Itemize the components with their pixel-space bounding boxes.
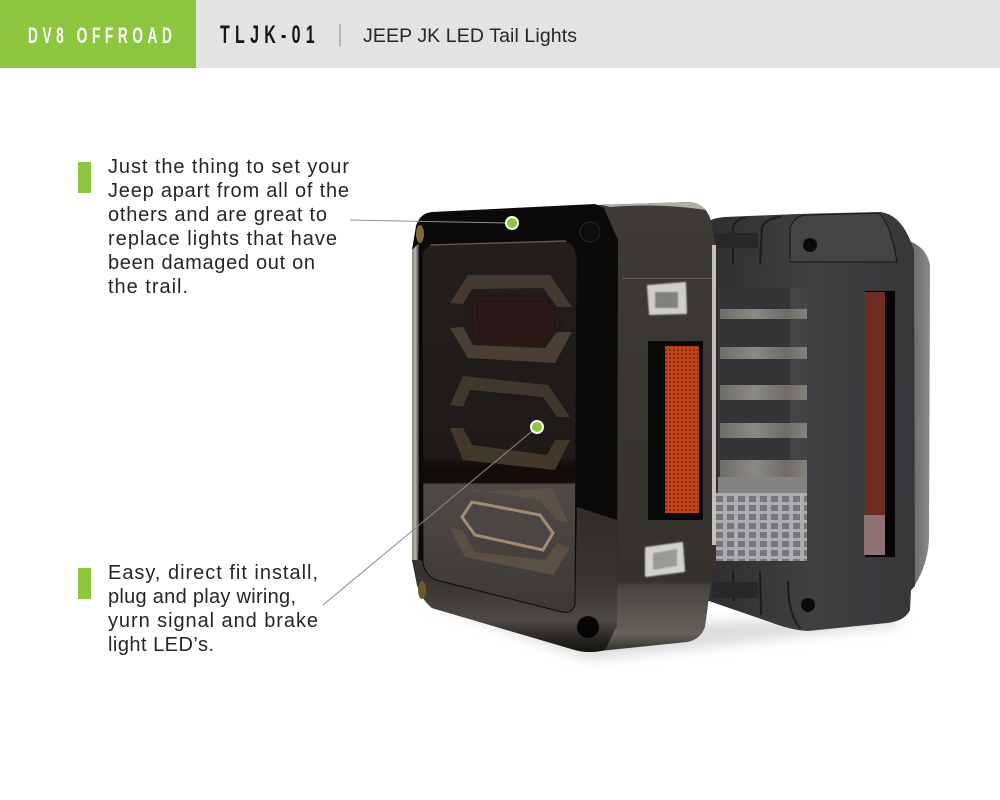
description 1: the trail. [108, 276, 188, 298]
product name: JEEP JK LED Tail Lights [363, 25, 577, 47]
left edge highlight [412, 243, 419, 560]
ground shadow [418, 600, 900, 660]
lens chevrons [450, 275, 572, 575]
leader line 2 [323, 427, 537, 605]
rear side lens [864, 291, 895, 557]
top highlight [602, 202, 706, 210]
description 2: plug and play wiring, [108, 586, 296, 608]
glossy lower rim [412, 507, 617, 652]
green marker 2 [78, 568, 91, 599]
bezel [412, 204, 618, 652]
feature text 1 [78, 156, 349, 298]
description 1: been damaged out on [108, 252, 315, 274]
description 1: Just the thing to set your [108, 156, 349, 178]
rear window [716, 288, 807, 562]
bottom clear lamp [646, 543, 684, 576]
product photo: tail lights [412, 202, 930, 660]
rear ribs [733, 217, 800, 628]
rear clips [712, 233, 758, 598]
rear housing [706, 212, 915, 631]
window bars [720, 309, 807, 478]
side body [590, 202, 716, 652]
description 2: light LED’s. [108, 634, 214, 656]
rear top cap [790, 213, 897, 262]
lens [422, 241, 577, 612]
hotspot 2 [531, 421, 543, 433]
rear screws [803, 238, 817, 252]
crystal reflector [716, 493, 807, 561]
front tail light [412, 202, 716, 652]
callout 2 [323, 421, 543, 605]
brand tab [0, 0, 196, 68]
screws [416, 222, 600, 638]
hotspot 1 [506, 217, 518, 229]
description 1: replace lights that have [108, 228, 337, 250]
brand tab: DV8 OFFROAD [28, 23, 172, 48]
description 2: Easy, direct fit install, [108, 562, 318, 584]
reflector [648, 341, 703, 520]
description 1: Jeep apart from all of the [108, 180, 349, 202]
header bar [0, 0, 1000, 68]
top clear lamp [648, 283, 686, 314]
callout 1 [350, 217, 518, 229]
product code: TLJK-01 [220, 22, 315, 49]
right edge highlight [712, 245, 716, 545]
feature text 2 [78, 562, 318, 656]
leader line 1 [350, 220, 512, 223]
rear plate [900, 240, 930, 592]
green marker 1 [78, 162, 91, 193]
description 2: yurn signal and brake [108, 610, 318, 632]
rear tail light [706, 212, 930, 631]
description 1: others and are great to [108, 204, 327, 226]
